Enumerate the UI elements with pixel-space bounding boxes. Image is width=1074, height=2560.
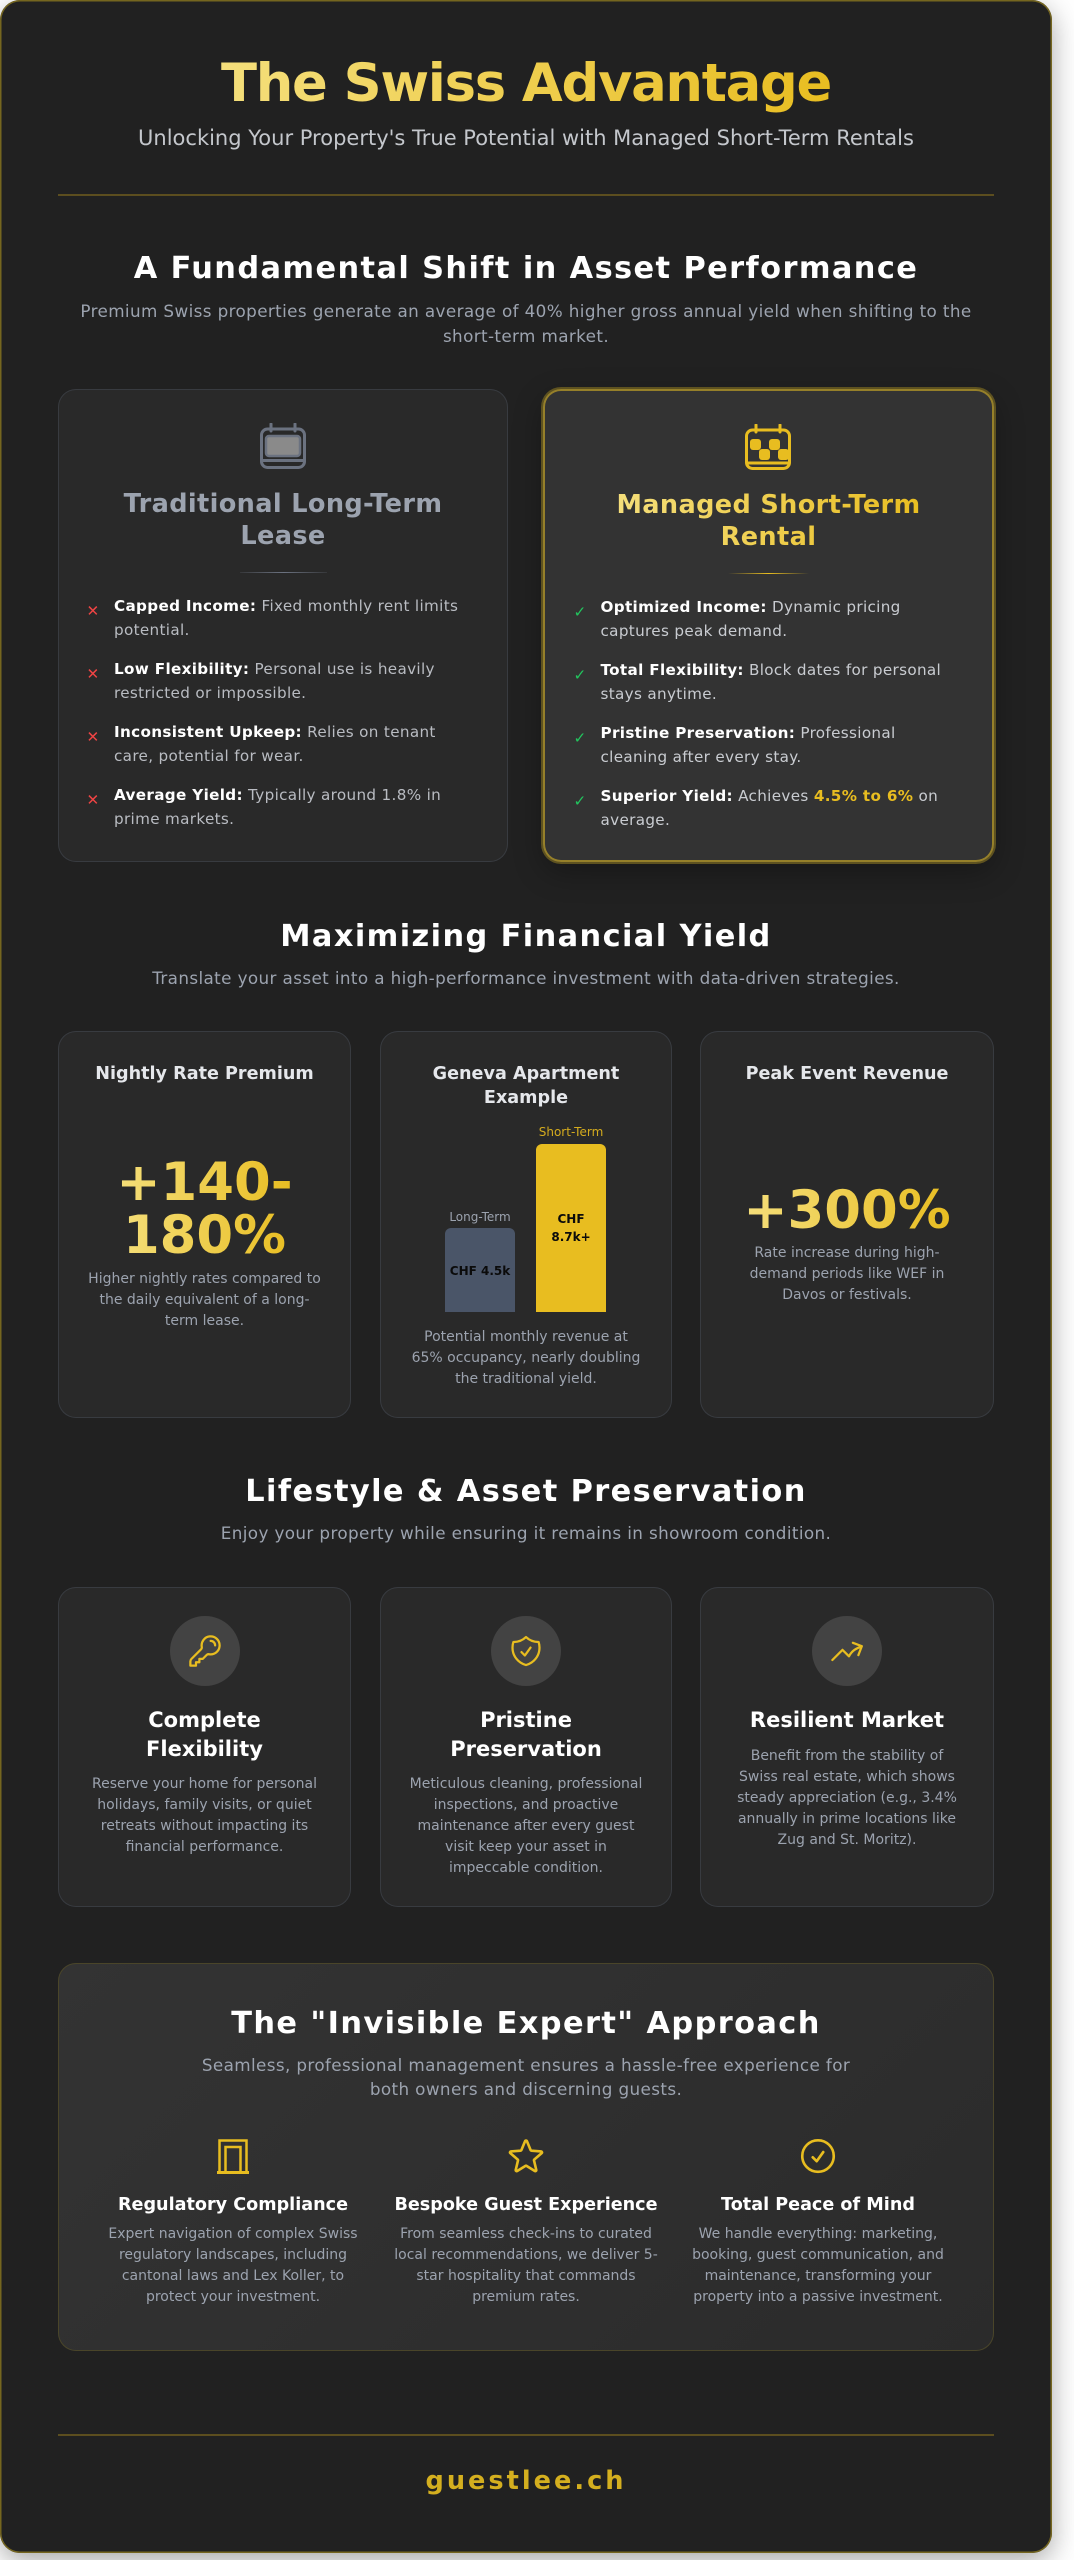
stat: nightly premium: 180% — [123, 1205, 286, 1266]
column: total peace of mind — [692, 2139, 944, 2304]
description: inspections, and proactive — [434, 1797, 618, 1813]
description — [737, 1748, 957, 1848]
list item: capped income: ✕ — [86, 602, 100, 620]
heading: managed rental — [613, 489, 924, 553]
heading: managed rental: Rental — [721, 522, 816, 552]
list item: optimized income — [573, 598, 901, 640]
card title: Peak Event Revenue — [746, 1064, 948, 1084]
icon: trending up — [812, 1616, 882, 1686]
heading: traditional lease — [124, 489, 442, 551]
header title: The Swiss Advantage — [221, 53, 831, 114]
card title: Resilient Market — [750, 1708, 944, 1732]
list item: superior yield: ✓ — [573, 792, 587, 810]
list item: low flexibility: Low Flexibility: Personal use is heavily — [114, 660, 435, 678]
panel: pristine preservation — [380, 1587, 672, 1907]
section heading: asset performance: A Fundamental Shift in Asset Performance — [134, 251, 918, 286]
panel: peak event revenue — [700, 1031, 994, 1418]
description: Davos or festivals. — [782, 1287, 912, 1303]
description: property into a passive investment. — [693, 2288, 943, 2304]
description: the daily equivalent of a long- — [99, 1292, 310, 1308]
heading: traditional lease: Lease — [240, 521, 326, 551]
section intro: asset performance: short-term market. — [443, 326, 609, 346]
description: cantonal laws and Lex Koller, to — [122, 2268, 344, 2284]
panel: nightly rate premium — [58, 1031, 351, 1418]
description: impeccable condition. — [449, 1860, 603, 1876]
description: Potential monthly revenue at — [424, 1328, 628, 1344]
description: premium rates. — [472, 2288, 580, 2304]
list item: inconsistent upkeep: ✕ — [86, 728, 100, 746]
card title: Complete — [148, 1708, 261, 1732]
description — [412, 1328, 640, 1386]
intro: invisible expert — [202, 2054, 850, 2099]
intro: invisible expert: both owners and discerning guests. — [370, 2079, 682, 2099]
card title — [450, 1708, 602, 1760]
section intro: lifestyle: Enjoy your property while ensuring it remains in showroom condition. — [221, 1523, 831, 1543]
description: visit keep your asset in — [445, 1839, 607, 1855]
column: regulatory compliance — [108, 2139, 358, 2304]
column: bespoke guest experience — [394, 2139, 658, 2304]
list item: total flexibility: Total Flexibility: Block dates for personal — [600, 661, 941, 679]
description — [88, 1270, 321, 1328]
list item: optimized income: ✓ — [573, 603, 587, 621]
list item: superior yield: Superior Yield: Achieves 4.5% to 6% on — [600, 787, 938, 805]
list item: average yield: Average Yield: Typically around 1.8% in — [114, 786, 441, 804]
description: Reserve your home for personal — [92, 1776, 317, 1792]
panel: traditional long-term lease — [58, 389, 508, 862]
list item: average yield: ✕ — [86, 791, 100, 809]
description: Swiss real estate, which shows — [739, 1769, 955, 1785]
description: Higher nightly rates compared to — [88, 1270, 321, 1286]
description: Meticulous cleaning, professional — [410, 1776, 642, 1792]
list item: low flexibility — [86, 660, 435, 702]
card title — [146, 1708, 263, 1760]
description: 65% occupancy, nearly doubling — [412, 1350, 640, 1366]
description — [692, 2226, 944, 2304]
card title — [433, 1064, 619, 1108]
section intro: financial yield: Translate your asset into a high-performance investment with data-driven strategies. — [152, 968, 900, 988]
icon: check circle — [800, 2139, 836, 2174]
list item: pristine preservation: ✓ — [573, 729, 587, 747]
list item: inconsistent upkeep: Inconsistent Upkeep: Relies on tenant — [114, 723, 436, 741]
heading: invisible expert: The "Invisible Expert" Approach — [231, 2006, 821, 2041]
description: star hospitality that commands — [416, 2268, 636, 2284]
description: Expert navigation of complex Swiss — [108, 2226, 358, 2242]
bar: short-term: CHF — [557, 1212, 585, 1226]
list item: total flexibility — [573, 661, 941, 703]
card title: Preservation — [450, 1736, 602, 1760]
title: Total Peace of Mind — [721, 2194, 915, 2214]
bar label: short-term: Short-Term — [539, 1125, 603, 1139]
description: protect your investment. — [146, 2288, 320, 2304]
list item: optimized income: Optimized Income: Dynamic pricing — [600, 598, 901, 616]
icon: star — [508, 2139, 544, 2172]
description — [410, 1776, 642, 1876]
title: Regulatory Compliance — [118, 2194, 348, 2214]
card title: Geneva Apartment — [433, 1064, 619, 1084]
panel: invisible expert approach — [58, 1963, 994, 2351]
panel: geneva apartment example — [380, 1031, 672, 1418]
description: local recommendations, we deliver 5- — [394, 2246, 658, 2262]
card title: Flexibility — [146, 1736, 263, 1760]
bar: short-term: 8.7k+ — [551, 1230, 591, 1244]
description — [394, 2226, 658, 2304]
list item: low flexibility: ✕ — [86, 665, 100, 683]
list item: average yield: prime markets. — [114, 810, 234, 828]
section intro: asset performance — [80, 301, 972, 346]
icon: shield check — [491, 1616, 561, 1686]
icon: calendar gold — [745, 424, 791, 470]
description — [108, 2226, 358, 2304]
description: regulatory landscapes, including — [119, 2246, 347, 2262]
heading: managed rental: Managed Short-Term — [616, 490, 921, 520]
description: maintenance after every guest — [418, 1818, 634, 1834]
icon: calendar grey — [260, 423, 306, 469]
bar chart — [445, 1125, 606, 1312]
list item: optimized income: captures peak demand. — [600, 622, 787, 640]
description: From seamless check-ins to curated — [400, 2226, 652, 2242]
list item: inconsistent upkeep: care, potential for wear. — [114, 747, 304, 765]
description: Rate increase during high- — [754, 1245, 940, 1261]
description: financial performance. — [126, 1839, 283, 1855]
panel: complete flexibility — [58, 1587, 351, 1907]
bar label: long-term: Long-Term — [449, 1210, 511, 1224]
section heading: lifestyle: Lifestyle & Asset Preservation — [245, 1474, 807, 1509]
description: retreats without impacting its — [101, 1818, 308, 1834]
footer brand: guestlee.ch — [426, 2466, 626, 2496]
section heading: financial yield: Maximizing Financial Yield — [280, 919, 772, 954]
description: annually in prime locations like — [738, 1811, 956, 1827]
card title: Pristine — [480, 1708, 572, 1732]
list item: capped income: Capped Income: Fixed monthly rent limits — [114, 597, 458, 615]
list item: superior yield — [573, 787, 938, 829]
stat: peak revenue: +300% — [743, 1180, 951, 1240]
description: steady appreciation (e.g., 3.4% — [737, 1790, 957, 1806]
description: Benefit from the stability of — [751, 1748, 943, 1764]
stat: nightly premium: +140- — [116, 1152, 293, 1213]
list item: inconsistent upkeep — [86, 723, 436, 765]
icon: key — [170, 1616, 240, 1686]
icon: door frame — [217, 2139, 249, 2174]
list item: pristine preservation — [573, 724, 896, 766]
list item: total flexibility: stays anytime. — [600, 685, 717, 703]
bar: short-term — [536, 1144, 606, 1312]
description: Zug and St. Moritz). — [778, 1832, 916, 1848]
list item: pristine preservation: Pristine Preservation: Professional — [600, 724, 896, 742]
bar: long-term: CHF 4.5k — [450, 1264, 510, 1278]
description: demand periods like WEF in — [750, 1266, 944, 1282]
description: the traditional yield. — [455, 1370, 597, 1386]
description: We handle everything: marketing, — [699, 2226, 937, 2242]
title: Bespoke Guest Experience — [394, 2194, 658, 2214]
panel: resilient market — [700, 1587, 994, 1907]
description: term lease. — [165, 1312, 244, 1328]
list item: superior yield: average. — [600, 811, 670, 829]
card title: Example — [484, 1088, 568, 1108]
bar: long-term — [445, 1228, 515, 1312]
list item: capped income: potential. — [114, 621, 190, 639]
stat: nightly premium — [113, 1157, 296, 1263]
description: maintenance, transforming your — [705, 2268, 931, 2284]
header subtitle: Unlocking Your Property's True Potential with Managed Short-Term Rentals — [138, 126, 914, 150]
description: holidays, family visits, or quiet — [97, 1797, 312, 1813]
panel: managed short-term rental — [543, 389, 994, 862]
list item: capped income — [86, 597, 458, 639]
description — [750, 1245, 944, 1303]
list item: pristine preservation: cleaning after every stay. — [600, 748, 802, 766]
heading: traditional lease: Traditional Long-Term — [124, 489, 442, 519]
list item: low flexibility: restricted or impossible. — [114, 684, 306, 702]
description: booking, guest communication, and — [692, 2246, 944, 2262]
section intro: asset performance: Premium Swiss properties generate an average of 40% higher gross annual yield when shifting to the — [80, 301, 972, 321]
intro: invisible expert: Seamless, professional management ensures a hassle-free experience for — [202, 2054, 850, 2074]
list item: total flexibility: ✓ — [573, 666, 587, 684]
card title: Nightly Rate Premium — [95, 1064, 314, 1084]
description — [92, 1776, 317, 1855]
list item: average yield — [86, 786, 441, 828]
